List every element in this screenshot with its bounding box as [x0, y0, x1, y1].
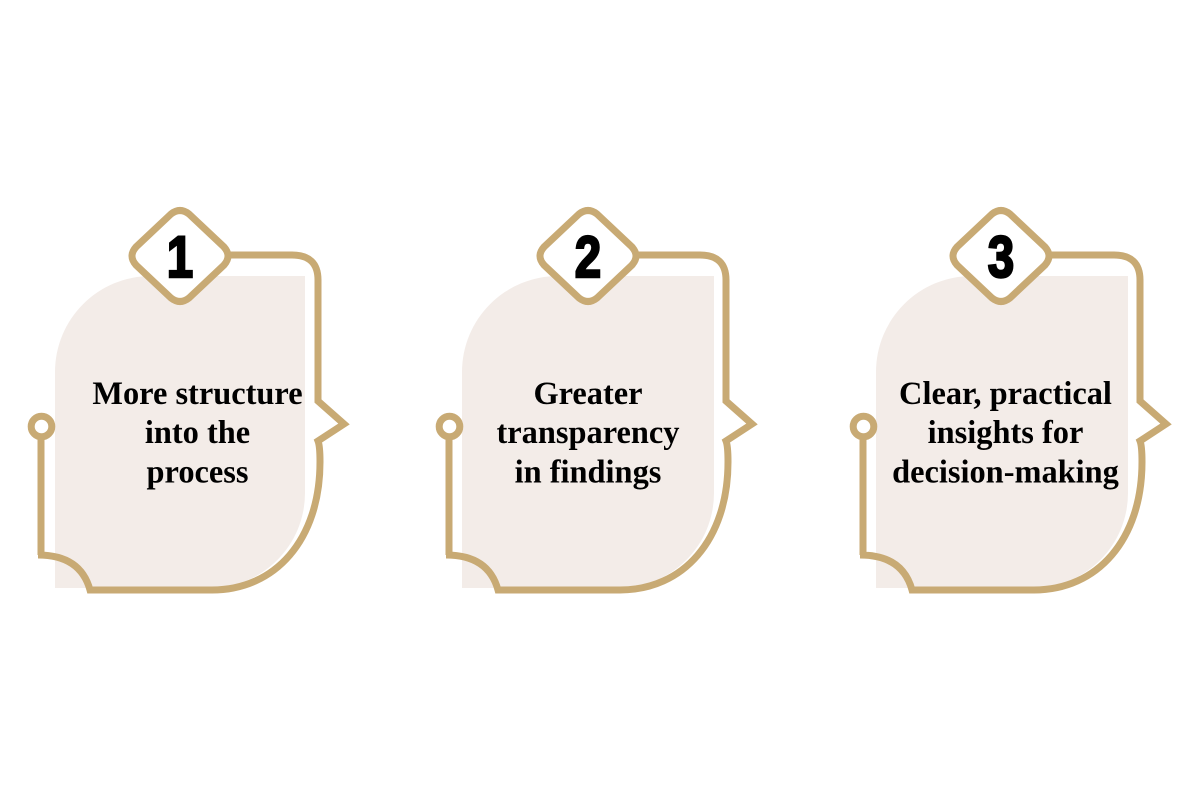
icon: card 2 connector ring [439, 416, 460, 437]
card 1 number diamond [132, 210, 228, 302]
icon: card 1 connector ring [31, 416, 52, 437]
card 1 text: More structure [92, 376, 303, 412]
card 3 [853, 210, 1166, 590]
card 1 text: into the [145, 415, 250, 451]
number 3: 3 [988, 226, 1014, 290]
card 2 number diamond [540, 210, 636, 302]
panel: card 3 background [876, 276, 1128, 588]
card 2 outline with arrow notch [446, 255, 752, 590]
card 3 text: Clear, practical [899, 376, 1112, 412]
icon: card 3 connector ring [853, 416, 874, 437]
card 2 [439, 210, 752, 590]
card 1 [31, 210, 344, 590]
card 2 text: Greater [533, 376, 643, 412]
number 2: 2 [575, 226, 601, 290]
card 3 text: insights for [928, 415, 1083, 451]
card 3 text [892, 376, 1119, 490]
card 2 text: in findings [515, 454, 661, 490]
card 3 outline with arrow notch [860, 255, 1166, 590]
card 3 number diamond [953, 210, 1049, 302]
card 1 text: process [147, 454, 248, 490]
card 1 outline with arrow notch [38, 255, 344, 590]
card 2 text [497, 376, 679, 490]
card 3 text: decision-making [892, 454, 1119, 490]
panel: card 1 background [55, 276, 305, 588]
card 1 text [92, 376, 303, 490]
card 2 text: transparency [497, 415, 679, 451]
number 1: 1 [167, 226, 193, 290]
panel: card 2 background [462, 276, 714, 588]
